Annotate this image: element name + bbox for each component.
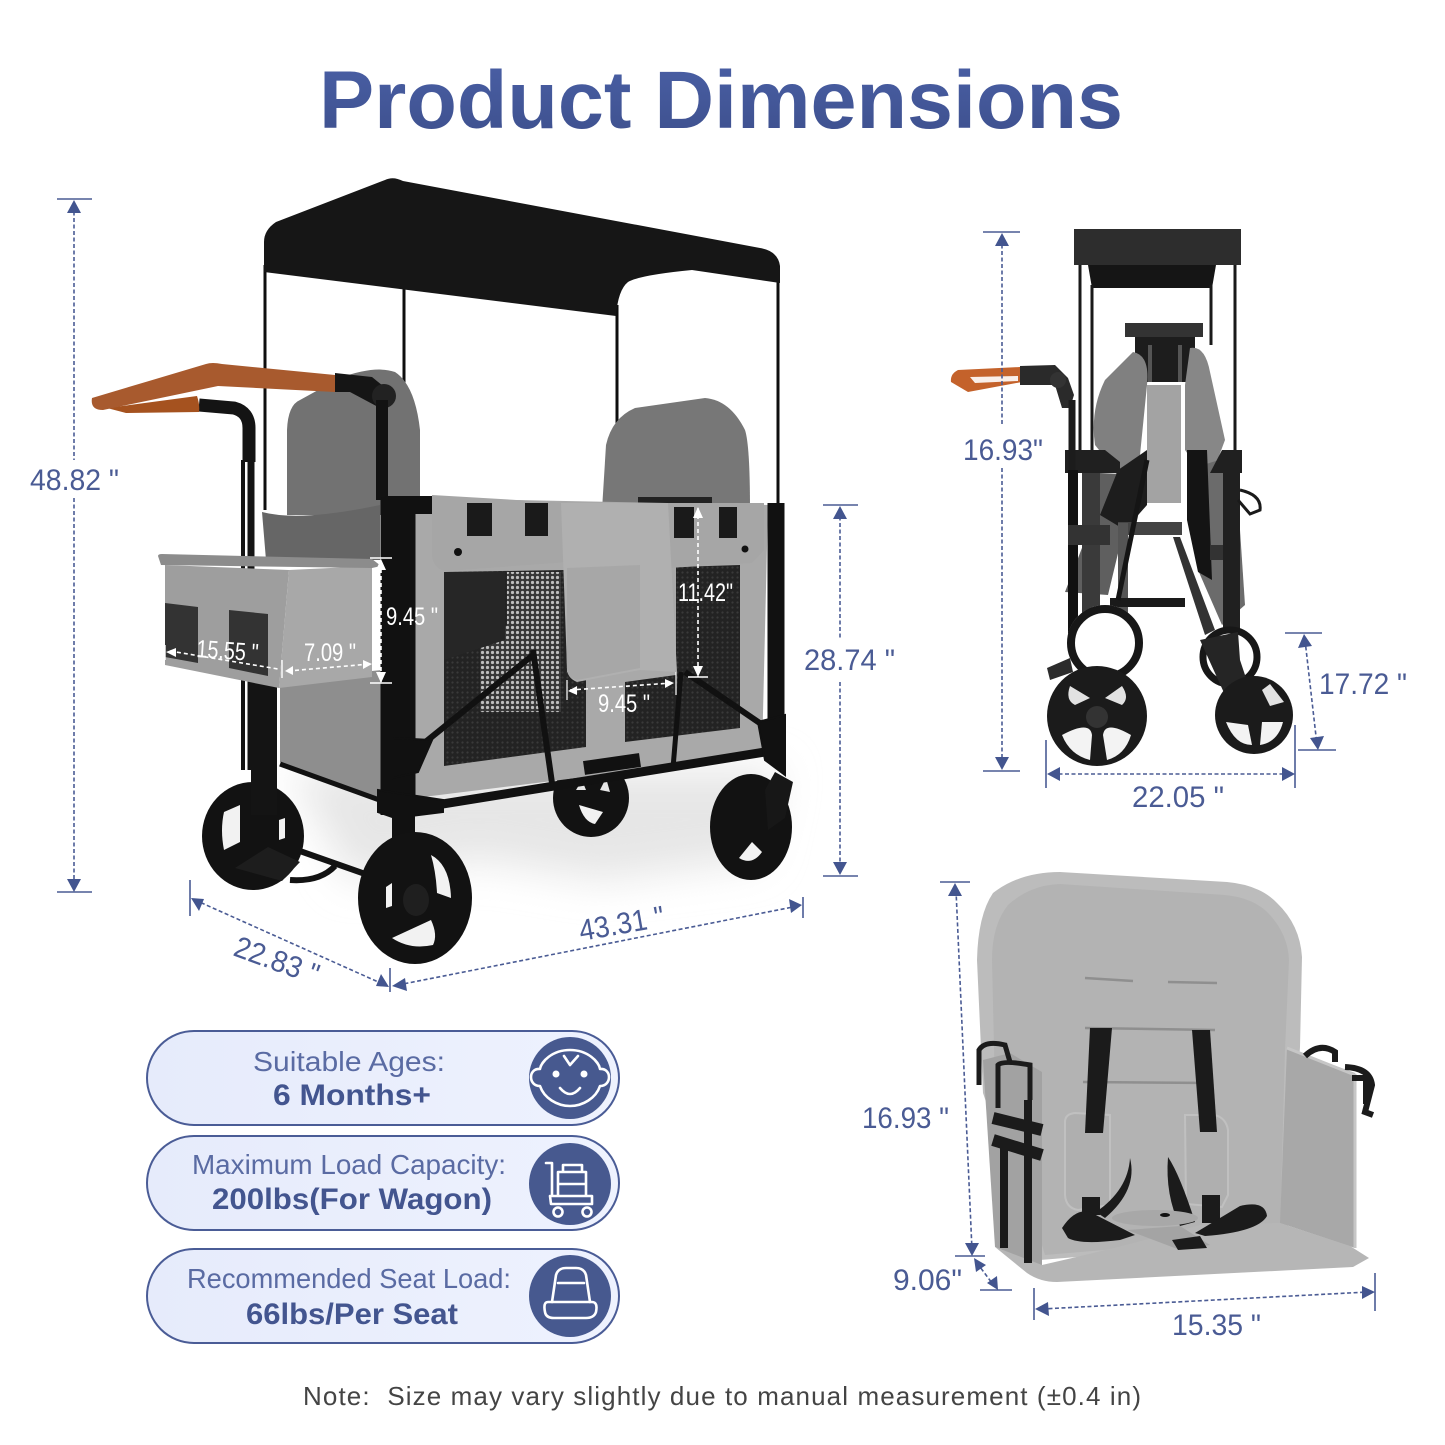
folded center panel <box>1147 385 1181 503</box>
dimension: overall height 48.82: 48.82 " <box>30 464 119 497</box>
dim 11.42 <box>678 507 733 677</box>
dimension: seat width 15.35: 15.35 " <box>1172 1309 1261 1342</box>
top flap with buckles <box>432 495 764 571</box>
front wheels <box>358 772 793 964</box>
dimension: width 22.83 <box>190 880 390 992</box>
icon: cart <box>529 1143 611 1225</box>
folded wagon illustration <box>951 229 1293 766</box>
label: Recommended Seat Load: <box>187 1263 511 1294</box>
lower left fabric <box>280 670 382 800</box>
dim 9.45 horizontal <box>567 672 676 718</box>
dimension: overall height 48.82 <box>30 199 119 892</box>
white inner dimensions <box>165 507 733 718</box>
floor shadow <box>290 770 780 880</box>
harness straps <box>1062 1028 1267 1242</box>
dimension: length 43.31 <box>392 897 803 991</box>
center pocket flap <box>561 503 677 682</box>
dim 7.09: 7.09 " <box>304 639 356 667</box>
footrest <box>235 847 368 881</box>
dim 11.42: 11.42" <box>678 579 733 607</box>
dimension: seat depth 9.06 <box>893 1258 1012 1297</box>
label: Suitable Ages: <box>253 1046 445 1077</box>
dimension: seat depth 9.06: 9.06" <box>893 1264 962 1297</box>
note: Note: Size may vary slightly due to manual measurement (±0.4 in) <box>303 1381 1141 1411</box>
canopy poles <box>265 225 778 510</box>
mesh windows <box>444 565 740 766</box>
dim 9.45 vertical <box>370 558 438 683</box>
dim 9.45 horizontal: 9.45 " <box>598 690 650 718</box>
value: 200lbs(For Wagon) <box>212 1183 492 1216</box>
dim 7.09 <box>282 639 372 678</box>
value: 66lbs/Per Seat <box>246 1298 458 1331</box>
canopy <box>264 178 780 316</box>
seat base <box>995 1223 1369 1282</box>
icon: seat <box>529 1255 611 1337</box>
dimension: seat height 16.93: 16.93 " <box>862 1102 949 1135</box>
dimension: folded height 16.93 <box>963 232 1043 771</box>
label: Maximum Load Capacity: <box>192 1149 506 1180</box>
dimension: folded width 22.05 <box>1046 725 1295 814</box>
left clips <box>979 1043 1042 1263</box>
folded cushions <box>1065 348 1245 625</box>
seat stitch lines <box>1083 978 1217 1083</box>
dim 15.55 <box>165 635 278 669</box>
folded frame <box>1065 450 1260 655</box>
buckle pad <box>1112 1210 1210 1250</box>
dimension: folded width 22.05: 22.05 " <box>1132 781 1224 814</box>
dimension: height 28.74 <box>804 505 895 876</box>
main wagon illustration <box>92 178 793 964</box>
dimension: length 43.31: 43.31 " <box>576 900 667 948</box>
dimension: seat width 15.35 <box>1034 1273 1375 1342</box>
folded handle <box>951 365 1074 470</box>
right clips <box>1305 1048 1373 1115</box>
folded top bracket <box>1125 323 1203 382</box>
folded wheels <box>1047 605 1293 766</box>
dimension: folded height 16.93: 16.93" <box>963 434 1043 467</box>
fabric body <box>415 498 768 798</box>
dimension: seat height 16.93 <box>862 882 985 1256</box>
panel: suitable ages <box>147 1031 619 1125</box>
panel: maximum load capacity <box>147 1136 619 1230</box>
seat right wall <box>1280 1048 1355 1248</box>
dimension: folded depth 17.72: 17.72 " <box>1319 668 1407 701</box>
rear wheels <box>202 759 629 890</box>
rear handle column <box>199 405 264 815</box>
rear seat backs <box>262 370 750 560</box>
dimension: folded depth 17.72 <box>1285 633 1407 750</box>
wooden handle <box>92 363 396 500</box>
seat left wall <box>983 1053 1042 1267</box>
dimension: width 22.83: 22.83 " <box>230 931 324 992</box>
value: 6 Months+ <box>273 1079 431 1112</box>
seat insert illustration <box>977 872 1373 1282</box>
shoulder pads <box>1065 1113 1228 1210</box>
dim 9.45 vertical: 9.45 " <box>386 603 438 631</box>
folded canopy <box>1074 229 1241 455</box>
seat back cushion <box>977 872 1302 1260</box>
dim 15.55: 15.55 " <box>196 635 259 667</box>
icon: baby face <box>529 1037 611 1119</box>
title: Product Dimensions <box>319 55 1123 146</box>
panel: recommended seat load <box>147 1249 619 1343</box>
dimension: height 28.74: 28.74 " <box>804 644 895 677</box>
straps and frame <box>280 497 785 818</box>
storage box <box>158 554 381 688</box>
